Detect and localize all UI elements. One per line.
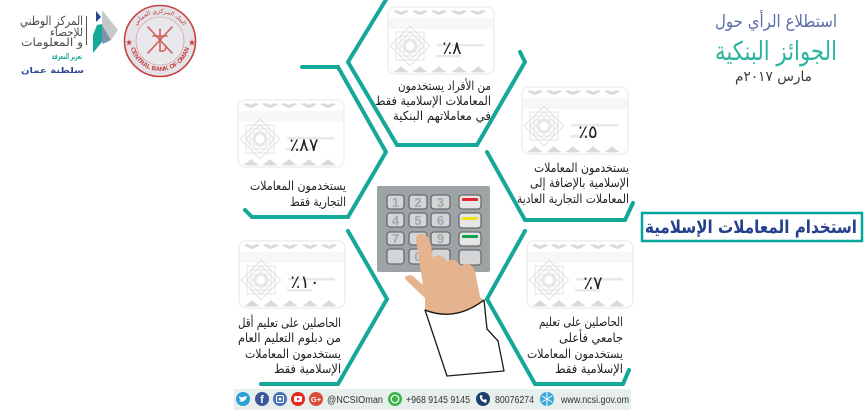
panel: islamic and commercial 5%: ٥٪: [578, 122, 598, 143]
logo text: centre name: للإحصاء: [50, 25, 83, 39]
logo: statistics centre mark: [86, 10, 118, 53]
icon: atm keypad: 0: [414, 249, 422, 264]
panel: below general diploma 10%: الحاصلين على تعليم أقل: [238, 314, 341, 331]
panel: commercial only 87%: [238, 67, 386, 217]
icon: atm keypad: 3: [437, 195, 444, 210]
website: www.ncsi.gov.om: [560, 395, 629, 406]
icon: atm keypad: 4: [392, 213, 400, 228]
icon: pointing hand: [405, 234, 484, 314]
panel: individuals islamic only 8%: ٨٪: [442, 38, 462, 59]
title block: [715, 10, 837, 85]
icon: atm keypad: [377, 186, 490, 272]
panel: individuals islamic only 8%: من الأفراد يستخدمون: [398, 78, 491, 94]
logo text: centre name: المركز الوطني: [20, 13, 83, 29]
panel: islamic and commercial 5%: المعاملات التجارية العادية: [517, 191, 629, 207]
icon: facebook: f: [260, 394, 264, 406]
icon: atm keypad: 6: [437, 213, 444, 228]
icon: atm keypad: 5: [414, 213, 422, 228]
icon: twitter: [236, 392, 250, 406]
logo text: centre name: سلطنة عمان: [21, 66, 84, 75]
title block: الجوائز البنكية: [715, 37, 837, 67]
logo text: centre name: [20, 13, 84, 75]
footer contact bar: [234, 389, 631, 410]
logo: central bank of oman seal: البنك المركزي العماني: [136, 8, 187, 26]
panel: commercial only 87%: ٨٧٪: [289, 135, 319, 156]
panel: university and above 7%: ٧٪: [583, 273, 603, 294]
logo: central bank of oman seal: CENTRAL BANK OF OMAN: [131, 47, 190, 72]
icon: whatsapp: [388, 392, 402, 406]
icon: atm keypad: 1: [392, 195, 399, 210]
panel: below general diploma 10%: ١٠٪: [290, 272, 320, 293]
panel: islamic and commercial 5%: يستخدمون المعاملات: [534, 160, 629, 176]
phone number: 80076274: [495, 395, 534, 406]
panel: below general diploma 10%: من دبلوم التعليم العام: [238, 330, 341, 346]
icon: instagram: [273, 392, 287, 406]
panel: individuals islamic only 8%: [348, 0, 525, 145]
handle: @NCSIOman: [327, 395, 383, 406]
panel: university and above 7%: [487, 231, 633, 384]
icon: atm keypad: 7: [392, 231, 399, 246]
panel: individuals islamic only 8%: المعاملات الإسلامية فقط: [375, 93, 491, 108]
icon: globe: [540, 392, 554, 406]
panel: individuals islamic only 8%: في معاملاتهم البنكية: [393, 108, 491, 124]
icon: atm keypad: 9: [437, 231, 444, 246]
title block: استطلاع الرأي حول: [715, 10, 837, 32]
panel: university and above 7%: جامعي فأعلى: [559, 329, 623, 345]
icon: phone: [476, 392, 490, 406]
icon: google plus: G+: [311, 395, 322, 404]
panel: islamic and commercial 5%: [487, 87, 633, 220]
title block: مارس ٢٠١٧م: [735, 69, 812, 85]
icon: youtube: [291, 392, 305, 406]
icon: atm keypad: 2: [414, 195, 422, 210]
panel: commercial only 87%: يستخدمون المعاملات: [250, 178, 346, 194]
panel: below general diploma 10%: [238, 231, 387, 384]
panel: university and above 7%: يستخدمون المعاملات: [527, 346, 623, 362]
logo: central bank of oman seal: [124, 4, 196, 78]
panel: commercial only 87%: التجارية فقط: [290, 194, 346, 210]
panel: islamic and commercial 5%: الإسلامية بالإضافة إلى: [530, 175, 629, 190]
icon: google plus: [309, 392, 323, 406]
icon: sleeve: [425, 300, 504, 376]
panel: university and above 7%: الحاصلين على تعليم: [539, 314, 623, 330]
panel: below general diploma 10%: الإسلامية فقط: [274, 361, 341, 376]
panel: below general diploma 10%: يستخدمون المعاملات: [245, 346, 341, 362]
icon: facebook: [255, 392, 269, 406]
logo text: centre name: و المعلومات: [21, 35, 83, 50]
logo text: centre name: تعزيز المعرفة: [52, 52, 82, 61]
panel: university and above 7%: الإسلامية فقط: [555, 361, 623, 376]
whatsapp number: +968 9145 9145: [406, 395, 470, 406]
